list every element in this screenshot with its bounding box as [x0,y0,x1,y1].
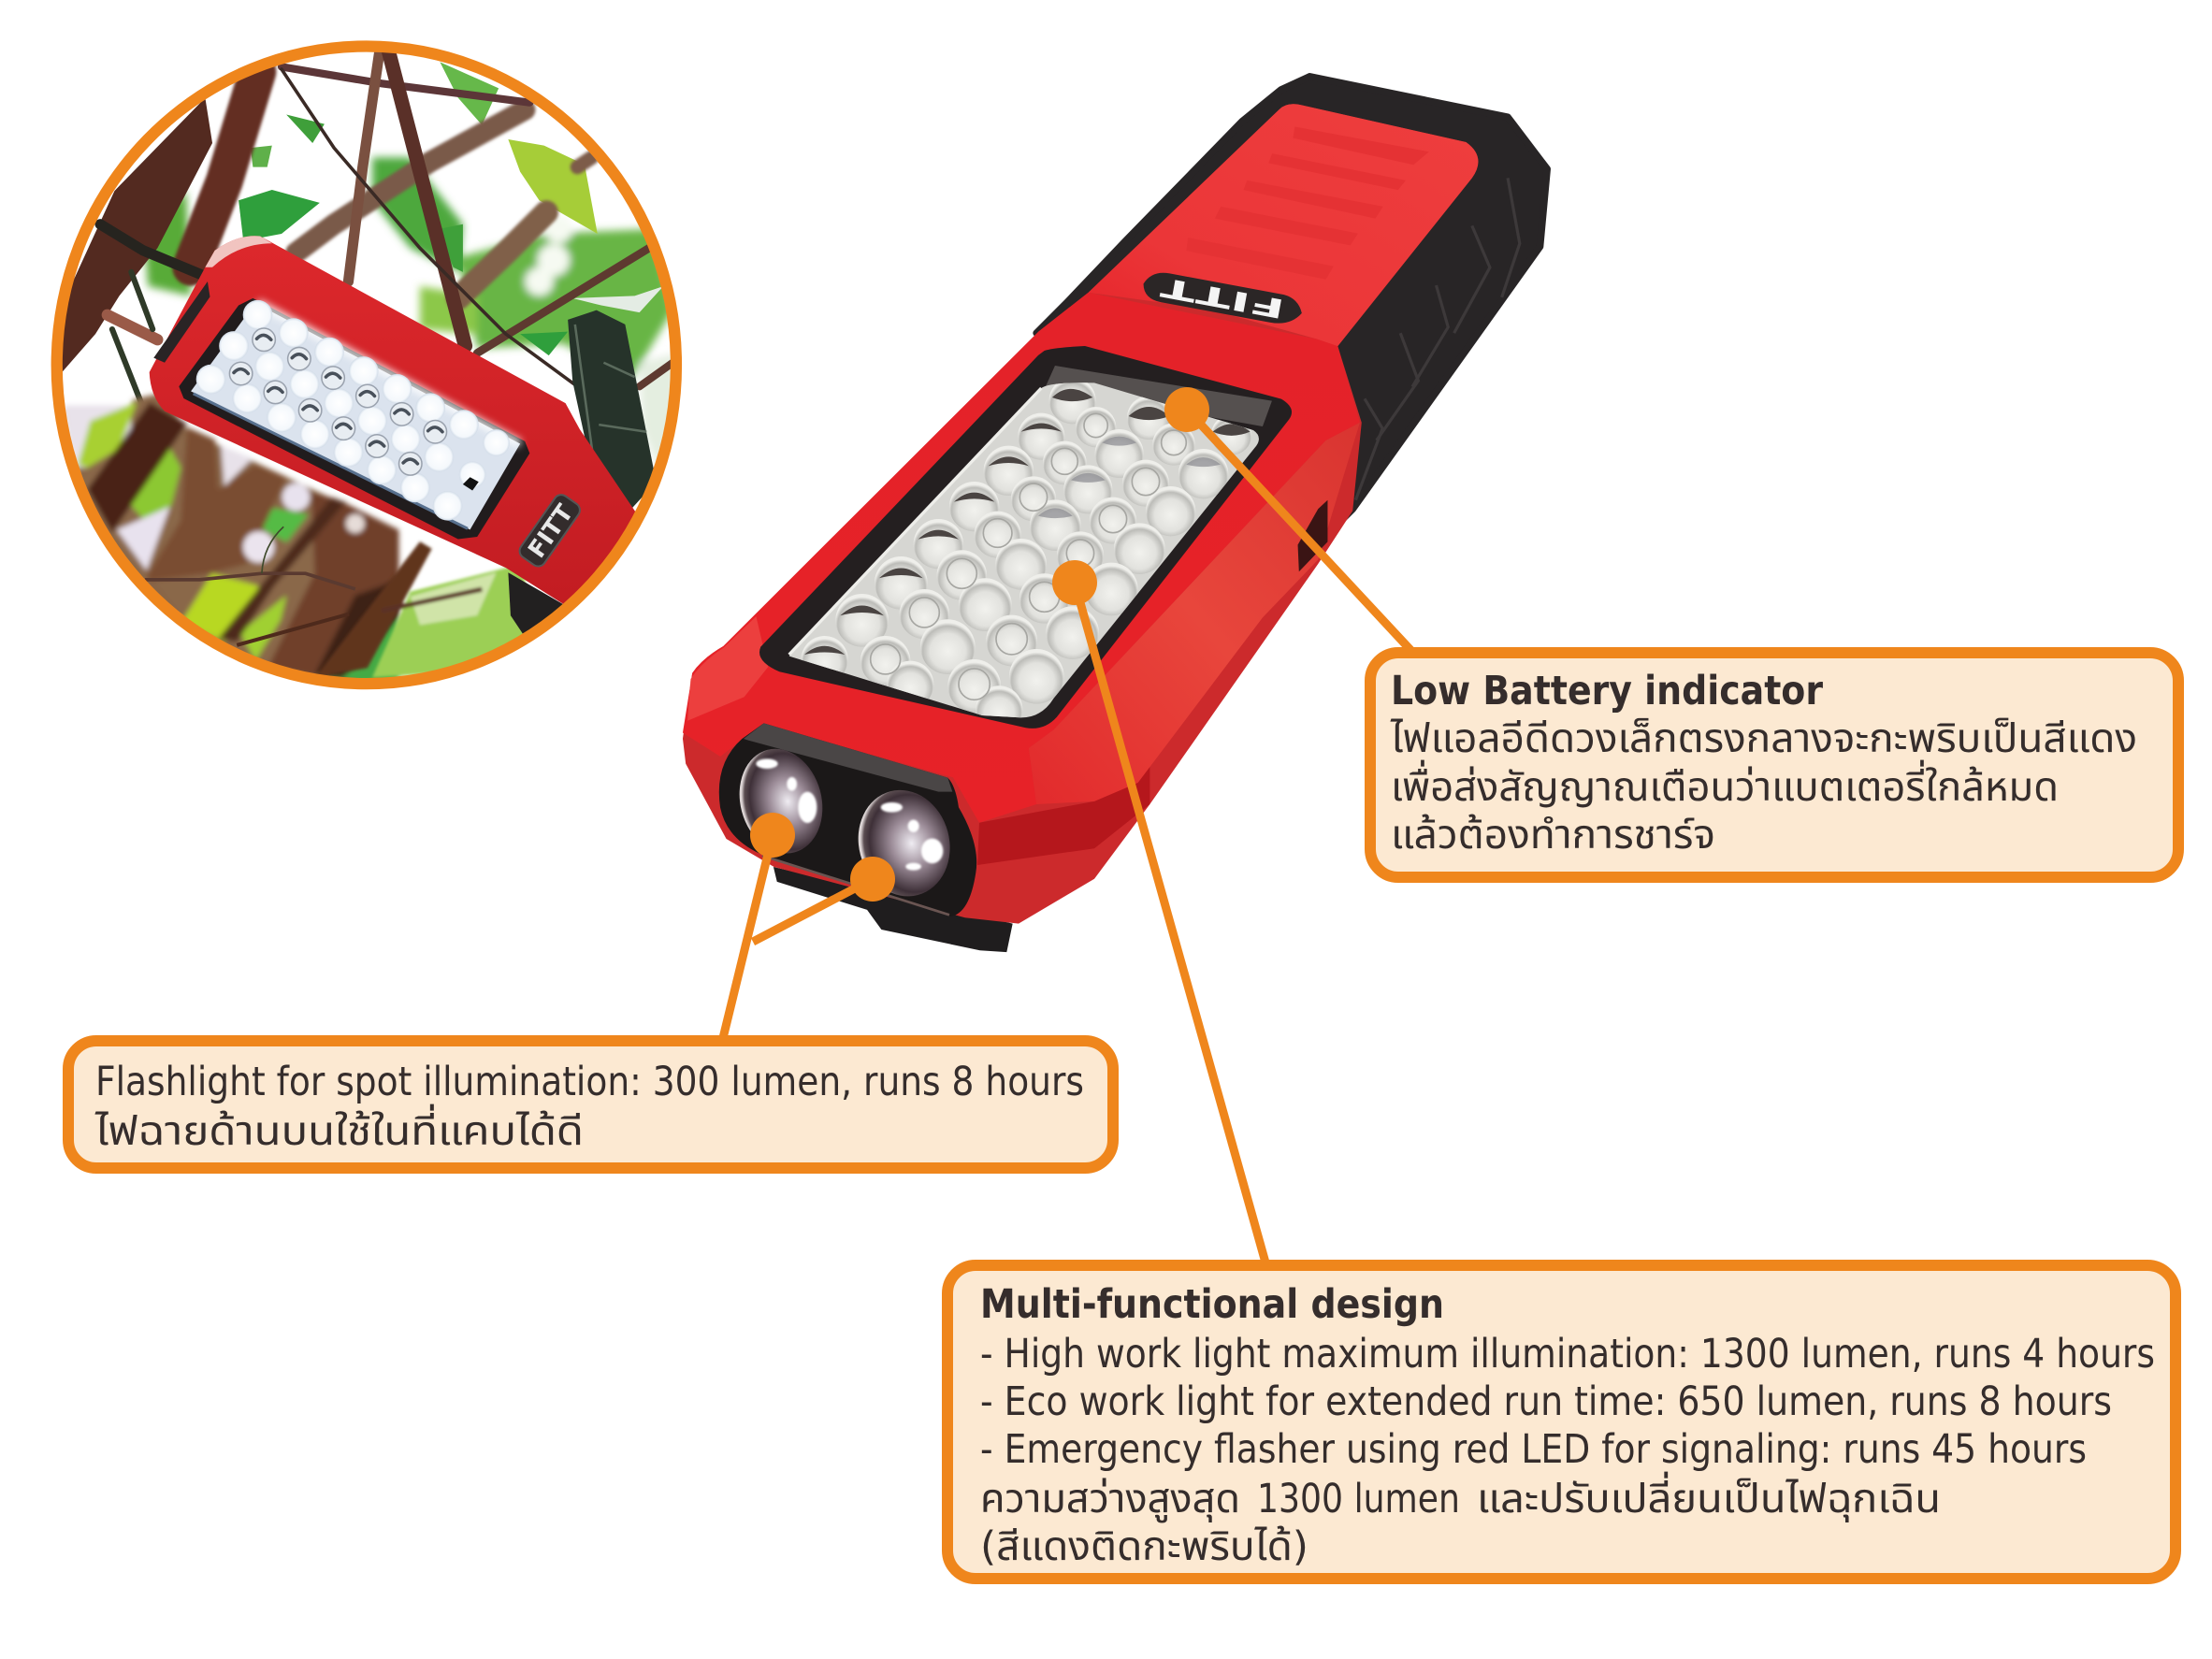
callout heading: Multi-functional design [980,1281,1444,1328]
photo logo: FITT [523,499,580,563]
flashlight lens right [846,780,961,907]
callout list: และปรับเปลี่ยนเป็นไฟฉุกเฉิน [1477,1471,1941,1522]
leader: flashlight [723,813,895,1038]
callout list: (สีแดงติดกะพริบได้) [980,1523,1308,1570]
callout: multi-functional design [947,1265,2176,1579]
right lower foliage [315,541,525,677]
leader: multi-functional design [1052,560,1265,1262]
callout list: 1300 lumen [1257,1476,1460,1522]
callout text: ไฟฉายด้านบนใช้ในที่แคบได้ดี [94,1104,584,1155]
callout list [980,1331,2155,1570]
logo: FITT [1158,271,1287,325]
callout heading: Low Battery indicator [1391,668,1824,714]
logo [1141,268,1305,328]
product: work light [683,77,1547,952]
red silhouette [683,104,1478,924]
slot [1298,500,1327,571]
callout body: เพื่อส่งสัญญาณเตือนว่าแบตเตอรี่ใกล้หมด [1391,759,2059,811]
rubber back [1036,77,1547,539]
callout text [94,1059,1084,1155]
bright side strip [1029,423,1360,804]
LED panel [759,346,1292,732]
light in photo [568,310,657,511]
lower foliage and trunks [64,393,398,688]
callout text: Flashlight for spot illumination: 300 lumen, runs 8 hours [95,1059,1084,1105]
callout list: - Emergency flasher using red LED for signaling: runs 45 hours [980,1426,2087,1473]
flashlight head [719,723,976,916]
top face [683,293,1360,823]
underside [773,867,1013,952]
callout body: ไฟแอลอีดีดวงเล็กตรงกลางจะกะพริบเป็นสีแดง [1390,715,2137,762]
flashlight lens left [728,740,834,863]
handle face with ribs [1089,104,1478,346]
callout body [1390,715,2137,858]
callout list: ความสว่างสูงสุด [980,1476,1240,1522]
upper branches [191,72,592,298]
shaded lower side [977,744,1149,865]
callout body: แล้วต้องทำการชาร์จ [1391,812,1715,858]
callout: flashlight [68,1041,1113,1168]
leader: low battery [1164,387,1412,652]
photo circle: light hanging in a tree [48,38,687,697]
callout: low battery indicator [1370,653,2178,877]
